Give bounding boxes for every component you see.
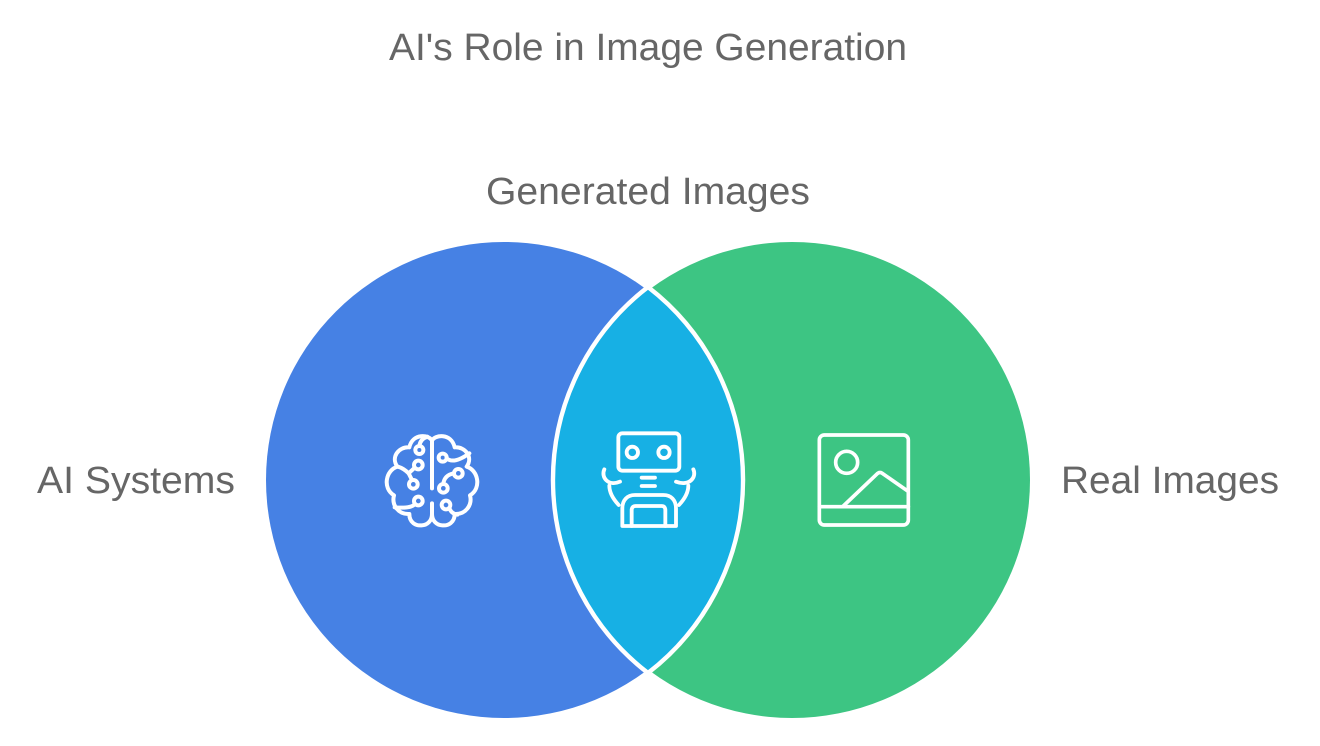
- venn circle: real images: [554, 242, 1030, 718]
- label: real images: Real Images: [1061, 460, 1279, 502]
- label: generated images: Generated Images: [486, 171, 810, 213]
- icon: image: [819, 435, 908, 525]
- label: AI systems: AI Systems: [37, 460, 235, 502]
- icon: brain: [387, 436, 477, 525]
- venn overlap: generated images: [553, 287, 743, 673]
- icon: robot: [603, 433, 694, 526]
- title: AI's Role in Image Generation: [389, 27, 907, 69]
- venn circle: AI systems: [266, 242, 742, 718]
